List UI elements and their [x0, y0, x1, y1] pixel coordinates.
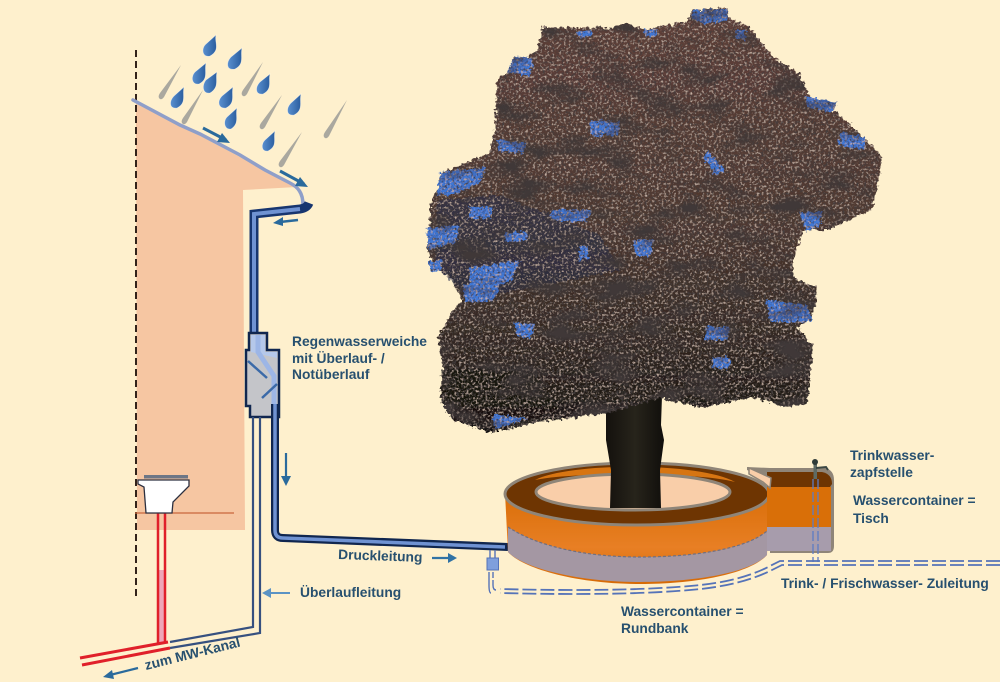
roof — [133, 100, 303, 205]
floor line — [135, 512, 234, 514]
toilet waste pipe — [80, 513, 170, 665]
label: pressure line: Druckleitung — [338, 547, 423, 565]
rainwater diverter — [246, 333, 279, 417]
peach flap — [749, 468, 771, 488]
sewer arrow — [103, 668, 138, 679]
building wall — [136, 102, 297, 530]
toilet — [138, 475, 189, 513]
building boundary dashed line — [135, 50, 137, 598]
container front wall — [505, 493, 769, 584]
dark foliage lower left — [440, 365, 560, 433]
label: rainwater diverter: mit Überlauf- / — [292, 350, 385, 366]
water section — [508, 527, 767, 582]
sky gaps in crown — [427, 9, 866, 430]
flow arrow down — [281, 453, 291, 486]
label: table container: Tisch — [853, 511, 889, 526]
pressure pipe — [275, 404, 508, 547]
ring inner opening — [536, 474, 730, 510]
label: table container: Wassercontainer = — [853, 493, 976, 508]
grey rain streaks — [159, 62, 347, 167]
table top opening — [767, 472, 832, 487]
label: round bench container: Rundbank — [621, 621, 689, 636]
rain — [159, 35, 347, 167]
label: rainwater diverter: Regenwasserweiche — [292, 334, 427, 349]
fresh water supply line — [500, 561, 1000, 594]
valve box — [487, 558, 498, 570]
tree crown — [427, 8, 882, 433]
diverter flaps — [248, 361, 277, 398]
blue raindrops — [171, 35, 301, 151]
label: fresh water supply: Trink- / Frischwasser- Zuleitung — [781, 576, 989, 591]
label: rainwater diverter: Notüberlauf — [292, 367, 370, 382]
rainwater downpipe — [254, 203, 309, 335]
ring top surface — [505, 463, 769, 525]
gutter arrow — [273, 217, 298, 226]
pressure line arrow — [432, 553, 457, 563]
label: to sewer: zum MW-Kanal — [143, 635, 242, 673]
label: overflow line: Überlaufleitung — [300, 584, 401, 600]
diverter upper inlet — [251, 335, 277, 358]
overflow pipe — [170, 417, 260, 648]
overflow line arrow — [262, 588, 290, 598]
circular water container — [505, 463, 769, 584]
ring inner back — [535, 467, 735, 482]
label: round bench container: Wassercontainer = — [621, 604, 744, 619]
dark blue shaded left side — [435, 195, 620, 300]
label: tap: zapfstelle — [850, 465, 913, 480]
supply line riser — [489, 550, 496, 593]
table water container — [747, 467, 834, 553]
diverter flap channel — [258, 335, 274, 405]
drinking water tap — [812, 459, 828, 562]
flow arrows on roof — [203, 128, 308, 187]
label: tap: Trinkwasser- — [850, 448, 935, 463]
tree trunk — [606, 396, 664, 508]
water level dashed line — [508, 527, 767, 557]
